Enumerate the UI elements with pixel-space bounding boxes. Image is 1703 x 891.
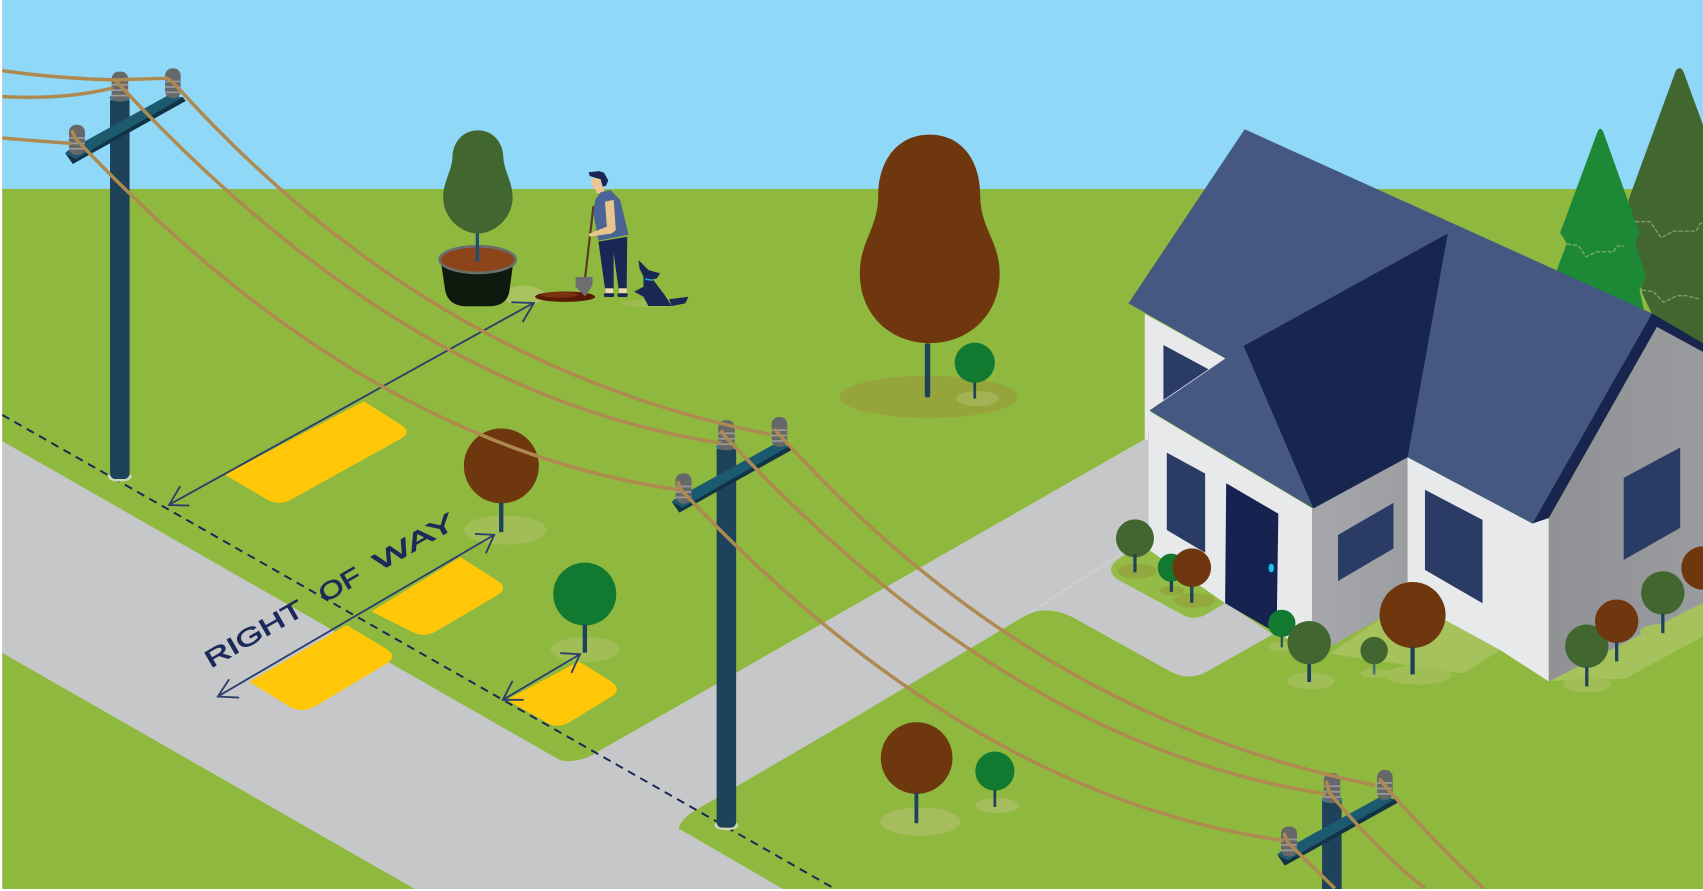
shrub green by step [1268,610,1295,652]
shrub dark green right corner [1563,624,1611,692]
insulators [676,417,787,504]
tree: large brown with ground shadow [840,135,1018,418]
walkway edge highlight [1026,548,1130,615]
door [1225,483,1278,633]
utility pole 2 [672,417,792,830]
cross arm [65,97,186,164]
house planting bed [1111,543,1225,618]
shrub large brown [1380,582,1452,685]
dashed right-of-way boundary [2,415,834,888]
shrub dark green far right [1640,571,1688,639]
power lines [2,71,1484,888]
shrub small dark green [1360,637,1389,678]
pad 4 [507,661,617,726]
pole cap ring [1322,796,1342,803]
span 1 wires [168,78,770,434]
tree: medium brown in right of way [464,428,546,545]
road and driveway [0,436,1273,889]
shrub brown by door [1172,548,1215,608]
shoes [604,293,614,297]
side gray wall [1549,327,1703,681]
hair [589,171,608,187]
recess gray wall [1312,456,1408,657]
conifer trees behind house [1557,68,1703,345]
tree: green lower lawn [975,752,1019,813]
span 2 wires [774,429,1375,785]
tree: small green near large tree [955,343,999,406]
rear left window [1163,345,1208,400]
right gable white wall [1408,457,1549,681]
collar [645,279,653,280]
shrubs by house [1116,519,1703,692]
rear left white wall [1145,314,1227,440]
cross arm [1277,798,1398,866]
dog body [634,260,672,306]
planting hole [535,291,595,302]
right of way label: WAY [369,508,460,577]
right of way label: RIGHT [200,596,309,674]
lower left roof [1149,346,1313,508]
pole cap ring [716,443,737,450]
arm [589,200,616,237]
pot rim and soil [440,246,516,273]
grass lawn [0,189,1703,891]
arrow: pad setback to potted tree [169,302,534,506]
central dark gable [1244,234,1448,508]
socks [605,288,613,293]
shrub green by door [1158,554,1185,595]
yellow pads [225,401,617,726]
conifer: dark green [1628,68,1703,345]
span 3 wires [1379,779,1484,888]
recess window [1338,503,1393,581]
pole base [108,472,132,482]
trunk [476,234,479,262]
shrub brown right [1595,600,1638,661]
bed: recess wall [1329,603,1500,673]
pole cap ring [109,94,130,102]
pole shaft [1322,798,1342,889]
shrub dark green by window [1116,519,1157,578]
pad 2 [371,557,503,635]
ground patch [622,299,678,307]
tree: potted tree with pot [440,130,545,306]
main roof [1128,129,1652,523]
bed: right wall [1547,592,1703,681]
side window [1624,447,1680,560]
sky [0,0,1703,190]
tree: brown lower lawn [880,722,961,836]
door knob [1269,564,1274,572]
pad 3 [249,625,392,710]
conifer: light green [1557,129,1646,315]
arrow: short setback [503,653,580,700]
front gable white wall [1148,411,1312,653]
right of way label: OF [314,563,366,608]
tail [669,297,688,306]
right gable window [1425,490,1483,603]
neck [596,185,604,193]
arrow: right of way width [218,534,494,698]
pole base [714,821,738,830]
dog [622,260,688,307]
insulators [1281,770,1393,857]
pole shaft [110,97,130,479]
shovel handle [585,206,593,277]
crown [443,130,513,234]
person digging with shovel [576,171,629,297]
house [1128,129,1703,681]
conifer squiggles: dark tree [1635,222,1703,302]
right of way label [200,508,460,674]
shirt [593,190,629,241]
conifer squiggle: light tree [1567,244,1624,257]
pot body [441,261,514,306]
pad 1 [225,401,407,503]
face [591,178,602,190]
utility pole 3 [1277,770,1398,889]
pole shaft [717,445,736,828]
ground patch near pot [502,286,545,305]
insulators [69,68,181,155]
shrub dark green front corner [1287,621,1335,689]
side lawn beds [1329,592,1703,681]
cross arm [672,445,792,513]
utility pole 1 [65,68,186,482]
shovel blade [576,277,592,296]
roof dark edge [1532,313,1703,523]
incoming wires [2,71,168,80]
pants [598,237,627,288]
shrub brown at edge [1681,546,1703,590]
tree: medium green in right of way [551,563,620,662]
front window [1167,453,1205,553]
